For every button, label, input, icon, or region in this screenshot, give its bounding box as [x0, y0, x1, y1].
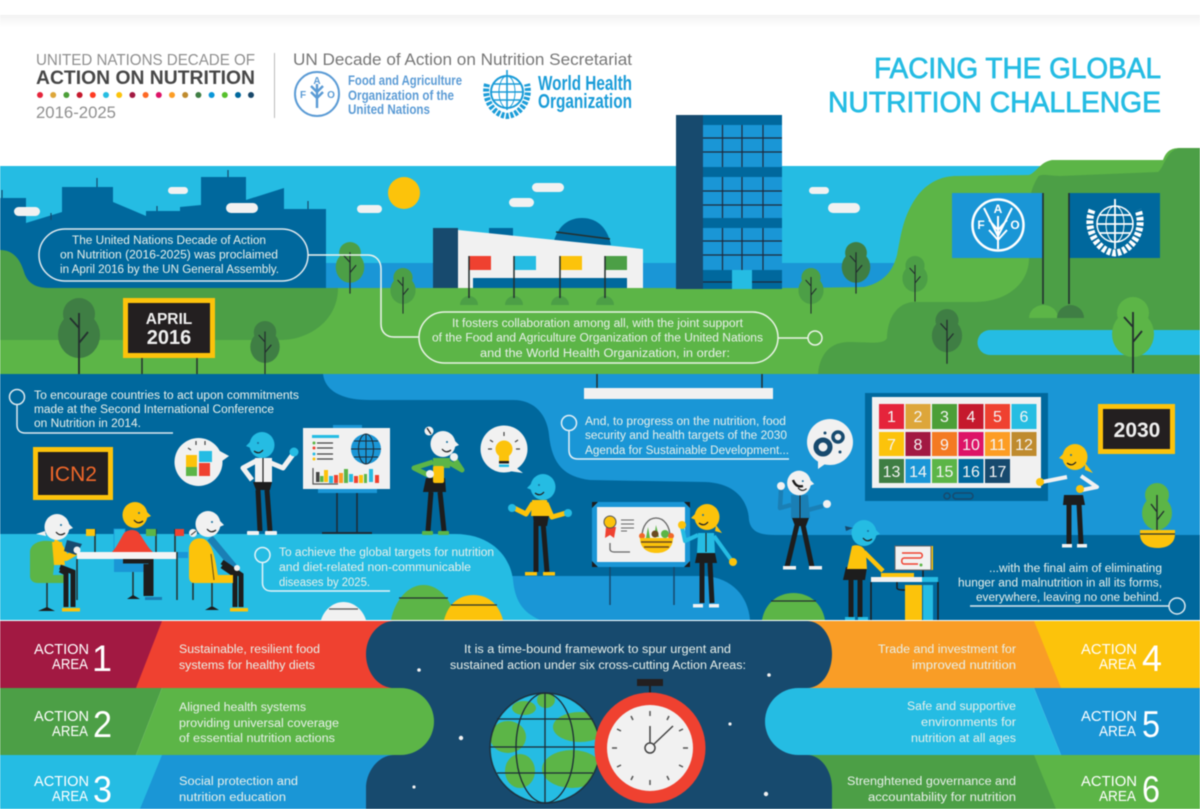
person: listener with green sleeves — [414, 426, 462, 535]
header: UN Decade logo: ACTION ON NUTRITION — [36, 68, 255, 89]
callout: final aim: ...with the final aim of eliminating — [989, 563, 1162, 575]
callout: collaboration: and the World Health Organization, in order: — [480, 348, 730, 360]
tile 9 — [932, 432, 957, 456]
tile 12: 12 — [1015, 437, 1033, 454]
callout: 2030 agenda — [562, 416, 789, 459]
tile 9: 9 — [940, 437, 949, 454]
callout: proclamation: on Nutrition (2016-2025) was proclaimed — [60, 250, 278, 262]
action area 6: Strenghtened governance and — [847, 776, 1016, 788]
icon: puzzle speech bubble — [174, 438, 229, 486]
action area 1: systems for healthy diets — [179, 660, 315, 672]
framework text: sustained action under six cross-cutting Action Areas: — [450, 660, 746, 672]
person: right at table — [189, 511, 248, 612]
person: at computer — [843, 520, 883, 620]
tile 5: 5 — [993, 409, 1002, 426]
connector arrow between callouts — [308, 255, 419, 337]
logo: FAO: F — [300, 90, 306, 101]
sign: 2030 — [1100, 406, 1172, 452]
action area 5: 5 — [1142, 704, 1160, 745]
callout: global targets: and diet-related non-communicable — [279, 562, 471, 574]
tile 15: 15 — [936, 464, 954, 481]
action area 6: accountability for nutrition — [868, 792, 1016, 804]
action area 4: 4 — [1142, 638, 1162, 679]
action area 1 — [34, 638, 320, 679]
action area 1: ACTION — [34, 642, 89, 658]
logo: FAO: Organization of the — [348, 88, 454, 103]
callout: ICN2 commitments: on Nutrition in 2014. — [34, 418, 141, 430]
person: pointing at SDG screen — [1036, 444, 1097, 548]
callout: collaboration — [419, 312, 822, 363]
logo: WHO: World Health — [538, 73, 632, 95]
action area 4: ACTION — [1081, 642, 1137, 658]
tile 8: 8 — [914, 437, 923, 454]
logo: FAO: A — [313, 76, 321, 87]
left dark hill — [0, 250, 338, 340]
title: NUTRITION CHALLENGE — [828, 87, 1161, 119]
tile 14: 14 — [909, 464, 927, 481]
logo: FAO: United Nations — [348, 102, 430, 117]
tile 2: 2 — [914, 409, 923, 426]
header: UN Decade logo — [36, 52, 255, 122]
action area 5: Safe and supportive — [907, 701, 1016, 713]
action area 2: ACTION — [34, 709, 89, 725]
tile 4: 4 — [967, 409, 976, 426]
table — [77, 529, 188, 600]
tile 13 — [879, 459, 904, 483]
callout: proclamation: in April 2016 by the UN General Assembly. — [60, 264, 279, 276]
tile 3: 3 — [940, 409, 949, 426]
sky — [0, 166, 1060, 290]
header: UN Decade logo: 2016-2025 — [36, 103, 116, 122]
tile 11 — [985, 432, 1010, 456]
action area 2: providing universal coverage — [179, 718, 339, 730]
tile 1 — [879, 404, 904, 429]
sign: April 2016: APRIL — [146, 311, 192, 328]
action area 2 — [34, 702, 339, 745]
tile 1: 1 — [887, 409, 896, 426]
bar chart — [313, 468, 379, 484]
logo: FAO: O — [327, 90, 335, 101]
header: secretariat and partner logos: UN Decade of Action on Nutrition Secretariat — [293, 50, 632, 69]
action area 5: environments for — [921, 717, 1016, 729]
icon: stopwatch — [594, 679, 706, 804]
action area 2: AREA — [52, 724, 88, 740]
callout: ICN2 commitments — [10, 390, 299, 433]
action area 6: AREA — [1099, 789, 1136, 805]
action area 3: ACTION — [34, 774, 89, 790]
callout: collaboration: It fosters collaboration among all, with the joint support — [452, 318, 744, 330]
action area 4 — [878, 638, 1162, 679]
action area 5: AREA — [1099, 724, 1136, 740]
globe icon — [351, 434, 381, 464]
river — [977, 330, 1200, 355]
stars — [412, 668, 771, 796]
tile 16: 16 — [962, 464, 980, 481]
action area 2: Aligned health systems — [179, 702, 306, 714]
framework text — [450, 644, 746, 672]
action area 3: AREA — [52, 789, 88, 805]
tile 8 — [906, 432, 930, 456]
action area 1: Sustainable, resilient food — [179, 644, 320, 656]
tile 12 — [1012, 432, 1036, 456]
sign: April 2016 — [126, 300, 212, 374]
callout: ICN2 commitments: made at the Second International Conference — [34, 404, 274, 416]
logo: WHO — [486, 70, 632, 116]
tile 3 — [932, 404, 957, 429]
potted plant — [1140, 483, 1175, 548]
city skyline — [0, 170, 326, 288]
top strip — [0, 15, 1200, 27]
tile 4 — [958, 404, 984, 429]
person: speaker with yellow shirt — [508, 474, 572, 576]
easel with basket — [592, 502, 690, 605]
action area 5: nutrition at all ages — [911, 733, 1016, 745]
icon: globe — [490, 692, 607, 803]
sun — [388, 177, 420, 209]
sign: April 2016: 2016 — [147, 327, 191, 349]
tile 6: 6 — [1020, 409, 1029, 426]
callout: 2030 agenda: security and health targets of the 2030 — [585, 430, 787, 442]
person: centre at table — [112, 502, 162, 600]
tile 15 — [932, 459, 957, 483]
sign: ICN2: ICN2 — [49, 463, 97, 486]
tall building — [676, 115, 782, 289]
white building — [433, 218, 643, 305]
panel: action areas — [0, 621, 1200, 809]
meeting group around a table — [30, 502, 248, 612]
tile 2 — [906, 404, 930, 429]
tile 10 — [958, 432, 984, 456]
tile 17: 17 — [989, 464, 1006, 481]
tile 6 — [1012, 404, 1036, 429]
callout: proclamation — [39, 229, 308, 281]
action area 3 — [34, 769, 298, 809]
person: left at table — [30, 514, 82, 612]
title — [828, 53, 1161, 119]
person: pointing at easel — [678, 504, 737, 608]
sign: ICN2 — [36, 450, 110, 498]
tile 7: 7 — [887, 437, 896, 454]
tile 11: 11 — [989, 437, 1006, 454]
icon: award ribbon — [604, 516, 634, 552]
band 2 pill — [136, 688, 434, 755]
FAO flag: A — [994, 202, 1003, 216]
action area bands — [0, 621, 1200, 809]
callout: global targets — [255, 547, 494, 591]
action area 5 — [907, 701, 1160, 745]
WHO flag — [1057, 193, 1160, 318]
trees — [58, 242, 1154, 374]
callout: global targets: To achieve the global targets for nutrition — [279, 547, 494, 559]
callout: final aim: everywhere, leaving no one behind. — [976, 592, 1162, 604]
tile 14 — [906, 459, 930, 483]
framework text: It is a time-bound framework to spur urgent and — [464, 644, 731, 656]
callout: 2030 agenda: Agenda for Sustainable Development... — [585, 445, 789, 457]
FAO flag: O — [1010, 218, 1020, 232]
logo: FAO: Food and Agriculture — [348, 73, 462, 88]
central framework panel — [366, 621, 832, 809]
callout: final aim — [958, 563, 1185, 614]
logo: WHO: Organization — [538, 91, 632, 113]
callout: 2030 agenda: And, to progress on the nutrition, food — [585, 416, 786, 428]
callout: collaboration: of the Food and Agriculture Organization of the United Nations — [432, 332, 763, 344]
logo: FAO — [295, 72, 462, 117]
header: secretariat and partner logos — [293, 50, 632, 117]
icon: food basket — [639, 518, 674, 553]
action area 2: of essential nutrition actions — [179, 733, 335, 745]
FAO flag — [952, 193, 1058, 318]
action area 1: 1 — [92, 638, 112, 679]
action area 4: improved nutrition — [912, 660, 1016, 672]
tile 5 — [985, 404, 1010, 429]
panel: middle section — [0, 374, 1200, 620]
band 5 pill — [765, 688, 1061, 755]
header: UN Decade logo: UNITED NATIONS DECADE OF — [36, 52, 255, 69]
callout: global targets: diseases by 2025. — [279, 577, 370, 589]
computer desk — [871, 546, 938, 620]
action area 2: 2 — [93, 704, 112, 745]
clouds — [14, 183, 860, 216]
tile 7 — [879, 432, 904, 456]
action area 3: nutrition education — [179, 792, 286, 804]
action area 6: ACTION — [1081, 774, 1137, 790]
callout: proclamation: The United Nations Decade of Action — [72, 235, 266, 247]
callout: final aim: hunger and malnutrition in all its forms, — [958, 578, 1162, 590]
person: walking talker — [777, 471, 831, 570]
chart board on stand — [303, 425, 390, 534]
action area 1: AREA — [52, 657, 88, 673]
tile 10: 10 — [962, 437, 980, 454]
sign: 2030: 2030 — [1114, 419, 1160, 442]
action area 3: 3 — [93, 769, 112, 809]
action area 4: AREA — [1099, 657, 1136, 673]
action area 6 — [847, 769, 1160, 809]
tile 13: 13 — [883, 464, 900, 481]
icon: light bulb speech bubble — [480, 426, 528, 473]
list icon — [312, 435, 339, 460]
tile 16 — [958, 459, 984, 483]
tile 17 — [985, 459, 1010, 483]
action area 5: ACTION — [1081, 709, 1137, 725]
callout: ICN2 commitments: To encourage countries to act upon commitments — [34, 390, 299, 402]
panel: landscape scene — [0, 115, 1200, 374]
action area 6: 6 — [1142, 769, 1160, 809]
hanging ceiling light — [584, 374, 773, 399]
FAO flag: F — [977, 218, 985, 232]
right hills — [800, 148, 1200, 374]
flags row — [460, 256, 627, 305]
decorative domes — [321, 585, 825, 620]
title: FACING THE GLOBAL — [874, 53, 1161, 85]
action area 3: Social protection and — [179, 776, 298, 788]
person: presenter with white shirt — [243, 432, 298, 535]
ground — [0, 288, 1200, 374]
action area 4: Trade and investment for — [878, 644, 1016, 656]
icon: gears speech bubble — [807, 419, 853, 469]
SDG screen — [865, 393, 1048, 501]
